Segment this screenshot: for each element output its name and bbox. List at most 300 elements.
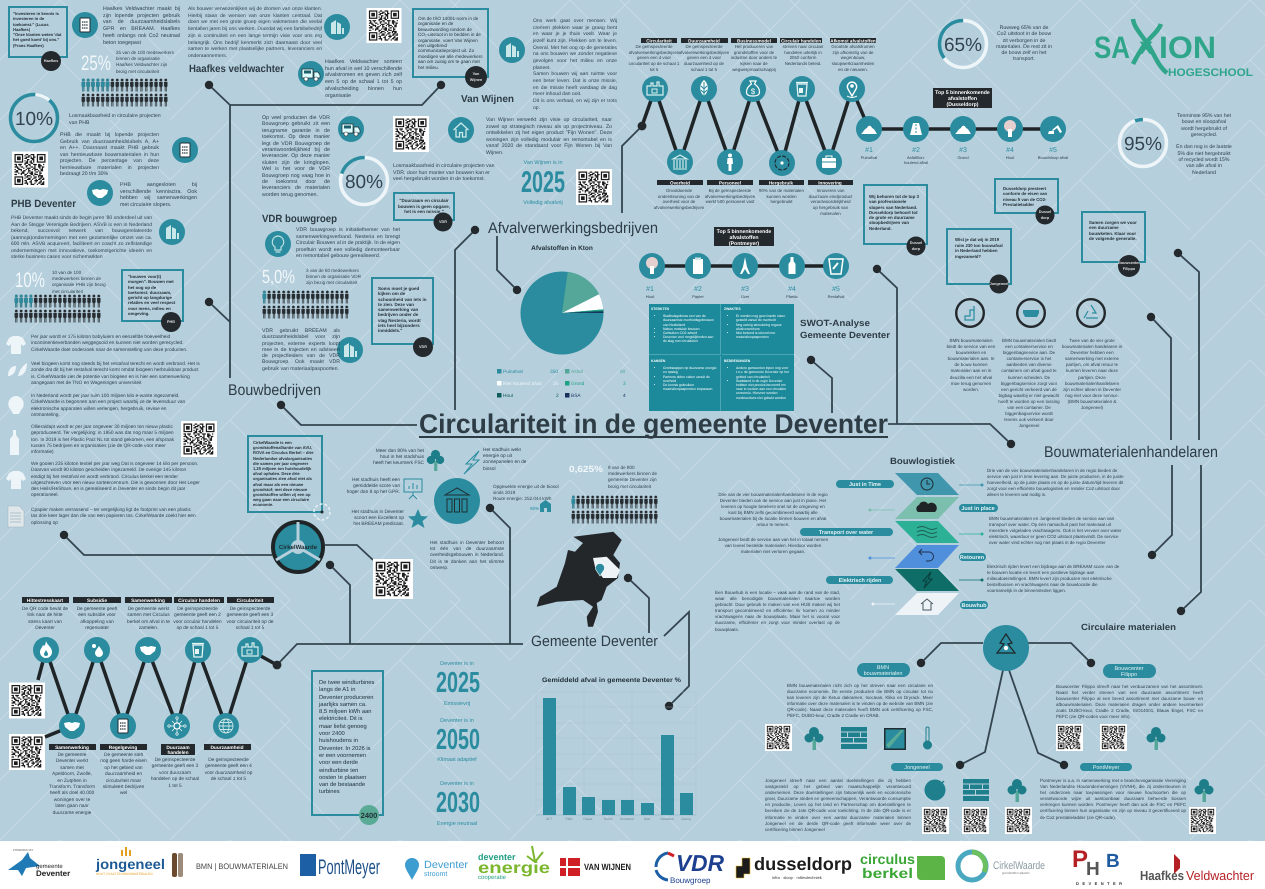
text: stadhuis GPR: Het stadhuis heeft een gemiddelde score van hoger dan 8 op het GPR.	[347, 478, 400, 495]
quote: windturbines: De twee windturbines langs de A1 in Deventer produceren jaarlijks samen ca. 8,5 miljoen kWh aan elektriciteit. Dit is maar liefst genoeg voor 2400 huishoudens in Deventer. In 2026 is er een voornemen voor een derde windturbine ten oosten te plaatsen van de bestaande turbines	[319, 680, 374, 795]
pie chart: afvalstoffen in Kton: Afvalstoffen in Kton	[531, 245, 593, 252]
bar chart: gemiddeld afval: GFT	[546, 817, 552, 821]
icon: house 95 percent: 95%	[530, 506, 539, 511]
pie legend: Asfalt	[571, 369, 584, 375]
pie legend: Puinafval	[503, 369, 523, 375]
year 2050 klimaat adaptief	[436, 718, 480, 763]
logo: BMN: BMN | BOUWMATERIALEN	[196, 862, 288, 871]
SWOT table: Stadhuisgebouw een van de duurzaamste overheidsgebouwen van Nederland	[663, 314, 714, 327]
quote: Jongeneel: Wist je dat wij in 2019 ruim 230 ton bouwafval in Nederland hebben ingezameld?	[955, 237, 1003, 258]
text: Van Wijnen fijn wonen: Van Wijnen verwerkt zijn visie op circulariteit, naar zowel op strategisch niveau als op projectniveau. Zo ontwikkelen zij het eigen product "Fijn Wonen". Deze woningen zijn volledig modulair en remontabel en is vanaf 2020 de standaard voor Fijn Wonen bij Van Wijnen.	[486, 117, 612, 156]
quote: VDR Nesteria	[371, 277, 434, 345]
ranking labels Pontmeyer: #1	[646, 286, 654, 293]
map of the Netherlands	[537, 532, 622, 627]
ring: 65 percent CO2	[930, 11, 996, 77]
text: Jongeneel materialen: Jongeneel streeft naar een aantal doelstellingen die zij hebben vastgesteld op het gebied van maatschappelijk verantwoord ondernemen. Deze doelstellingen zijn fatsoenlijk werk en economische groei, Duurzame steden en gemeenschappen, Verantwoorde consumptie en productie, Leven op het land en Partnerschap om doelstellingen te bereiken zie de 1ste QR-code voor toelichting. In de 2de QR-code is er informatie te vinden over een aantal duurzame materialen binnen Jongeneel en de derde QR-code geeft informatie weer over de certificering binnen Jongeneel	[765, 778, 911, 832]
logo: deventer energie: deventer	[478, 852, 516, 862]
pie legend: 25	[553, 381, 559, 387]
bar chart: gemiddeld afval: Textiel	[603, 817, 613, 821]
SWOT table: Deventer veel mogelijkheden aan de slag met circulariteit	[663, 335, 713, 343]
text: De geïnspecteerde gemeente geeft een 4 voor duurzaamheid op de schaal 1 tot 5	[205, 758, 252, 782]
logo: circulus berkel: berkel	[862, 865, 913, 881]
quote: Bouwcenter Filippo: Samen zorgen we voor een duurzame bouwketen. Klaar voor de volgende generatie.	[1089, 220, 1137, 241]
top row labels gemeente: Circulariteit	[237, 598, 264, 604]
pill: Bouwcenter Filippo: Bouwcenter	[1114, 666, 1144, 672]
SWOT table: Stadsland in de regio Deventer hebben niet precies bevoorrd om naar te werken aan een circulaire economie. Hiervoor worden medewerkers niet gebukt worden	[736, 379, 786, 400]
logo: circulus berkel	[860, 851, 945, 881]
SWOT table: Partners delen zaken vanuit de overheid	[663, 375, 710, 383]
SWOT table: KANSEN	[651, 359, 665, 363]
ranking labels Pontmeyer: #2	[694, 286, 702, 293]
text: Haafkes 25 of 100: 25 van de 100 medewerkers binnen de organisatie Haafkes Veldwachter zijn bezig met circulariteit	[116, 50, 174, 74]
logo: CirkelWaarde: CirkelWaarde	[993, 860, 1045, 872]
ranking labels Dusseldorp: Hout	[1006, 155, 1015, 160]
pill: Jongeneel	[891, 763, 943, 771]
ranking labels Dusseldorp: Bouw/sloop afval	[1038, 155, 1068, 160]
connector: Afvalverwerkingsbedrijven to title	[455, 226, 479, 410]
ranking labels Dusseldorp: #2	[912, 147, 920, 154]
logo: Deventer stroomt: Deventer	[424, 859, 469, 871]
ring: 95 percent recycling	[1113, 113, 1173, 173]
footer logos	[0, 841, 1265, 889]
text: VDR 3 van 60: 3 van de 60 medewerkers binnen de organisatie VDR zijn bezig met circulariteit	[306, 268, 361, 285]
bottom row labels gemeente: Samenwerking	[55, 745, 89, 751]
top row labels afvalverwerkers	[641, 38, 876, 43]
text: De gemeente Deventer werkt samen met Apeldoorn, Zwolle, en Zutphen in Transform. Transform heeft als doel 40.000 woningen over te laten gaan naar duurzame energie	[49, 753, 95, 816]
icon: tree Filippo	[1146, 727, 1166, 750]
connector: heading to pie chart	[497, 236, 521, 294]
logo: PontMeyer: PontMeyer	[318, 856, 380, 879]
top 5 box Pontmeyer: afvalstoffen	[729, 235, 759, 241]
logo: gemeente Deventer: gemeente	[36, 864, 63, 870]
text: Pontmeyer materialen: Pontmeyer is o.a. in samenwerking met e branchevoganisatie Vereniging Van Nederlandse Houtondernemingen (VVNH), die zij ondersteunen in het onderzoek naar toepassingen voor nieuwe houtsoorten die op verantwoorde wijze uit aantoonbaar duurzaam beheerde bossen verkregen kunnen worden. Pontmeyer heeft dan ook de FSC en PEFC certificering binnen hun organisatie en zijn op niveau 3 gecertificeerd op de Co2 prestatieladder (zie QR-code).	[1040, 778, 1186, 820]
pill: Jongeneel: Jongeneel	[904, 765, 930, 771]
SWOT table: STERKTES	[651, 307, 669, 311]
heading: Bouwmaterialenhandelaren: Bouwmaterialenhandelaren	[1044, 444, 1218, 461]
top 5 box Pontmeyer: Top 5 binnenkomende	[717, 229, 771, 235]
text: opgewekte energie	[493, 484, 559, 501]
icon: bricks	[841, 727, 867, 749]
black name badges: Filippo	[1123, 267, 1136, 271]
quote: CirkelWaarde: CirkelWaarde is een grondstoffenalliantie van AVU, ROVA en Circulus Berkel – drie Nederlandse afvalorganisaties die samen per jaar ongeveer 1,25 miljoen ton huishoudelijk afval ophalen. Deze drie organisaties zien afval niet als afval maar als een nieuwe grondstof; met deze nieuwe grondstoffen willen zij een op weg gaan naar een circulaire economie.	[253, 440, 314, 507]
icon: thermometer	[923, 727, 932, 750]
10 percent: 10%	[15, 269, 45, 292]
Saxion logo: ION	[1159, 30, 1216, 65]
black name badges: Dussel	[1039, 210, 1051, 214]
logo: deventer energie: energie	[478, 860, 550, 877]
text: Het produceren van grondstoffen voor de industrie door anders te kijken naar de wegwerpmaatschappij	[731, 44, 777, 72]
text: De geïnspecteerde gemeente geeft een 3 voor circulariteit op de schaal 1 tot 5	[227, 607, 273, 631]
text: De gemeente werkt samen met Circulus berkel om afval in te zamelen.	[127, 607, 170, 631]
quote: Jongeneel	[946, 228, 1012, 285]
text: gemeente 5 of 800: 8 van de 800 medewerkers binnen de gemeente Deventer zijn bezig met circulariteit	[608, 465, 657, 489]
logo: deventer energie	[478, 846, 550, 881]
quote: CirkelWaarde	[247, 435, 323, 513]
ranking labels Pontmeyer: Papier	[692, 294, 704, 299]
big white percentages	[15, 52, 603, 474]
year 2030 energie neutraal: Energie neutraal	[437, 821, 477, 827]
quote: Dusseldorp top 3	[863, 184, 928, 245]
top row labels gemeente: Circulair handelen	[178, 598, 220, 604]
quote: Van Wijnen	[412, 8, 489, 78]
icon: target	[924, 780, 946, 800]
bottom row labels afvalverwerkers: Innovering	[818, 180, 842, 185]
heading: Gemeente Deventer: Gemeente Deventer	[531, 633, 658, 650]
top 5 box Dusseldorp: afvalstoffen	[948, 96, 977, 102]
icon: house 95 percent	[530, 500, 551, 512]
text: Haafkes afval: Haafkes Veldwachter sorteert hun afval in wel 10 verschillende afvalstromen en geven zich zelf een 5 op de schaal 1 tot 5 op afvalscheiding binnen hun organisatie	[325, 59, 402, 99]
bottom row labels afvalverwerkers: Overheid	[670, 180, 690, 185]
top 5 box Dusseldorp: (Dusseldorp)	[946, 102, 979, 108]
bottom row labels gemeente	[49, 744, 251, 756]
SWOT table: Gerbuiken CO2 arbeid	[663, 331, 697, 335]
pill: Bouwcenter Filippo: Filippo	[1121, 672, 1137, 678]
icon: small recycling mark	[314, 504, 330, 520]
connector: CirkelWaarde to list	[60, 531, 272, 555]
year 2025 Van Wijnen: Van Wijnen is in	[523, 160, 563, 166]
text: textiel: We gooien 235 kiloton textiel per jaar weg Dat is ongeveer 14 kilo per persoon. Daarvan wordt 90 kiloton gescheiden ingezameld. De overige 145 kiloton eindigt bij het restafval en wordt verbrand. Circulus Berkel een tender uitgeschreven voor een nieuw sorteercentrum. Die is gewonnen door Het Leger des Heils/ReShare, en is gerealiseerd in Deventer en sinds begin dit jaar operationeel.	[31, 462, 200, 498]
pie legend: 4	[623, 393, 626, 399]
logo: dusseldorp: infra · sloop · milieutechniek	[772, 875, 822, 880]
black name badges: Jongeneel	[990, 282, 1008, 286]
ring: 10 percent PHB: 10%	[15, 109, 53, 130]
icon: leaves	[8, 363, 27, 376]
bottom row labels gemeente: Duurzaam	[166, 745, 190, 751]
labels top row gemeente	[22, 606, 274, 631]
connector: Bouwmaterialenhandelaren down	[1148, 465, 1201, 615]
text: VDR BREEAM: VDR gebruikt BREEAM als duurzaamheidslabel voor zijn projecten, externe experts loopt mee in de trajecten en adviseert de projectleiders van de VDR Bouwgroep. Ook maakt VDR gebruik van materiaalpaspoorten.	[262, 328, 340, 372]
year 2030 energie neutraal: 2030	[436, 787, 480, 819]
ranking labels Dusseldorp: Asfalt/ton-	[907, 155, 926, 160]
icon: star	[408, 509, 428, 528]
ring: 65 percent CO2: 65%	[944, 35, 982, 56]
people: VDR 3 of 60	[262, 290, 349, 320]
text: Haafkes labels: Haafkes Veldwachter maakt bij zijn lopende projecten gebruik van de duurzaamheidslabels GPR en BREAAM. Haafkes heeft onlangs ook Co2 neutraal beton toegepast	[103, 6, 180, 46]
logo: PontMeyer	[300, 854, 380, 879]
quote: VDR Nesteria: Soms moet je goed kijken om de schoonheid van iets in te zien. Deze van samenwerking van bedrijven onder de vlag Nesteria, wordt iets heel bijzonders inmiddels."	[378, 286, 427, 333]
bar chart: gemiddeld afval	[536, 677, 696, 821]
logo: jongeneel	[95, 847, 165, 876]
text: als bouwer: Als bouwer verwezenlijken wij de dromen van onze klanten. Hierbij staan de wensen van onze klanten centraal. Dat doen we met een grote groep eigen vakmensen die veelal tientallen jaren bij ons werken. Doordat wij een familiebedrijf zijn is continuïteit en een lange termijn visie voor ons erg belangrijk. Ons bedrijf kenmerkt zich daarnaast door veel samen te werken met plaatselijke partners, leveranciers en onderaannemers.	[188, 6, 322, 59]
5,0 percent: 5,0%	[262, 267, 295, 288]
circulaire materialen icons	[804, 625, 1214, 802]
pie legend: 2	[556, 393, 559, 399]
logo: Haafkes Veldwachter	[1140, 854, 1255, 883]
pie legend: 3	[623, 381, 626, 387]
text: 90% van de materialen kunnen worden hergebruikt	[759, 188, 804, 204]
year 2025 emissievrij	[436, 661, 480, 707]
icon: clock	[921, 478, 933, 490]
logo: jongeneel: HOUT, PLAAT EN BOUWMATERIALEN	[96, 872, 153, 876]
text: PHB intro: PHB Deventer maakt sinds de begin jaren '80 onderdeel uit van Aan de Stegge Verenigde Bedrijven. ASVB is een in Nederland bekend, succesvol netwerk van bouwgerelateerde (aannoja)ondernemingen met een gezamenlijke omzet van ca. 600 mln. ASVB acquireert, faciliteert en coacht zo zelfstandige ondernemingen met innovatieve, toekomstgerichte ideeën en sterke business cases voor nichemarkten	[11, 215, 152, 260]
icon: lightning	[464, 451, 479, 474]
black name badges	[41, 51, 1140, 357]
ring: 80 percent VDR: 80%	[345, 172, 383, 193]
heading: PHB Deventer: PHB Deventer	[11, 198, 76, 210]
quote: Haafkes	[8, 6, 68, 58]
year 2030 energie neutraal	[436, 781, 480, 827]
bottom row labels afvalverwerkers: Personeel	[719, 180, 741, 185]
logo: gemeente Deventer	[8, 848, 70, 878]
people: gemeente 5 of 800	[571, 495, 658, 525]
pill: Bouwcenter Filippo	[1103, 664, 1156, 678]
text: streven naar circulair handelen uiterlijk in 2050 conform Nederlands beleid.	[783, 44, 823, 66]
bottom row labels afvalverwerkers: Hergebruik	[769, 180, 794, 185]
logo: VDR: Bouwgroep	[670, 876, 711, 885]
text: biogeen: Veel biogeen komt nog steeds bij het restafval terecht en wordt verbrand. Het is zonde dat dit bij het restafval terecht komt omdat biogeen herbruikbaar product is. CirkelWaarde ziet de potentie van biogeen en is hier een samenwerking aangegaan met de TNO en Wageningen universiteit	[31, 362, 200, 386]
quote: Haafkes: "Onze klanten weten 'dat het goed komt' bij ons." (Frans Haafkes)	[13, 32, 61, 48]
text: losmaakbaarheid VDR: Losmaakbaarheid in circulaire projecten van VDR, door hun manier van bouwen kan er veel hergebruikt worden in de toekomst.	[393, 163, 495, 182]
top 5 timeline Pontmeyer	[639, 253, 849, 279]
text: De geïnspecteerde gemeente geeft een 3 voor duurzaam handelen op de schaal 1 tot 5	[151, 758, 199, 789]
black name badges: Bouwcenter	[1118, 261, 1140, 265]
list icons CirkelWaarde	[6, 336, 27, 527]
labels bottom row gemeente	[49, 752, 252, 816]
text: PHB 10 of 100: 10 van de 100 medewerkers binnen de organisatie PHB zijn bezig met circulariteit	[52, 270, 106, 294]
text: De geïnspecteerde afvalverwerkingsbedrijven geven een 4 voor circulariteit op de schaal 1 tot 5	[629, 44, 679, 72]
text: e-waste: In Nederland wordt per jaar ruim 100 miljoen kilo e-waste ingezameld. CirkelWaarde is begonnen aan een project waarbij ze de levensduur van elektronische apparaten willen verlengen, hergebruik, revisie en ontmanteling.	[31, 394, 185, 418]
Saxion logo: HOGESCHOOL	[1168, 67, 1253, 79]
top row labels gemeente: Subsidie	[87, 598, 107, 604]
ranking labels Pontmeyer: Restafval	[828, 294, 844, 299]
title: Circulariteit in de gemeente Deventer	[419, 409, 888, 439]
text: just in time left: Drie van de vier bouwmaterialenhandelaren in de regio Deventer bieden ook de service aan just in place. Het leveren op hoogte betekent snel tot de omgeving en kost bij BMN zelfs gecombineerd waarbij alle bouwmaterialen bij de locatie binnen bouwen en afval retour te nemen.	[718, 492, 828, 527]
connector: Bouwbedrijven to title	[277, 401, 417, 425]
CirkelWaarde logo ring	[273, 522, 323, 572]
CirkelWaarde logo ring: CirkelWaarde	[279, 544, 318, 551]
pill: BMN: bouwmaterialen	[864, 671, 902, 677]
icon: bricks Jongeneel	[963, 779, 989, 801]
connector lines	[60, 81, 1201, 769]
ranking labels Pontmeyer: #3	[741, 286, 749, 293]
logo: PHB Deventer: DEVENTER	[1076, 881, 1122, 886]
icon: shirt	[6, 336, 26, 354]
text: opgewekte energie: Opgewekte energie uit de biosol sinds 2019	[493, 484, 559, 495]
SWOT table: Er worden nog geen harde eisen gesteld vanuit de overheid	[736, 314, 785, 322]
bouwlogistiek pills: Just in Time	[849, 482, 881, 488]
ranking labels Pontmeyer: IJzer	[741, 294, 750, 299]
SWOT table	[649, 304, 794, 411]
text: De gemeente stelt nog geen harde eisen op het gebied van duurzaamheid en circulariteit maar stimuleert bedrijven wel	[100, 753, 147, 796]
bar chart: gemiddeld afval: Overig	[681, 817, 691, 821]
text: Bij de geïnspecteerde afvalverwerkingsbedrijven werkt 500 personeel vast	[705, 188, 755, 204]
logo: deventer energie: cooperatie	[478, 874, 507, 881]
icon: presentation	[404, 479, 422, 499]
text: De geïnspecteerde afvalverwerkingsbedrijven geven een 4 voor duurzaamheid op de schaal 1 tot 5	[679, 44, 729, 72]
text: stadhuis BREEAM: Het stadhuis in Deventer scoort een Excellent op het BREEAM predicaat.	[351, 510, 404, 527]
logo: Deventer stroomt: stroomt	[424, 871, 447, 878]
text: De geïnspecteerde gemeente geeft een 2 voor circulair handelen op de schaal 1 tot 5	[173, 607, 222, 631]
text: PHB kennis: PHB aangesloten bij verschillende kennisctra. Ook hebben wij samenwerkingen met circulaire slopers.	[120, 182, 197, 208]
text: BMN service: BMN bouwmaterialen biedt de service van een bouwrekken en bouwmaterialen aan. In de bouw kunnen materialen aan en in deuzilla een het afval moe terug genomen worden.	[947, 338, 995, 392]
text: just in time right: Drie van de vier bouwmaterialenhandelaren in de regio bieden de service van just in time levering aan. De juiste producten, in de juiste hoeveelheid, op de juiste plaats en op de juiste datum/tijd leveren dit zorgt voor een efficiënte bouwlogistiek en minder Co2 uitstoot door alleen te leveren wat nodig is.	[987, 468, 1124, 497]
target years	[436, 160, 565, 827]
Saxion logo: SA	[1094, 30, 1130, 65]
top 5 box Dusseldorp	[933, 88, 992, 108]
logo: VDR	[656, 850, 724, 885]
heading: Bouwbedrijven: Bouwbedrijven	[228, 382, 321, 399]
icon: return arrow	[919, 549, 934, 561]
connector: bar chart to heading	[664, 612, 689, 710]
bar chart: gemiddeld afval: PMD	[565, 817, 573, 821]
connector: title to right	[873, 265, 1015, 448]
SWOT table: Niet bekend is tekend met materialenpaspoorten	[736, 331, 775, 339]
logo: PHB Deventer	[1072, 846, 1122, 886]
text: BMN container: BMN bouwmaterialen biedt een containerservice en biggenbagservice aan. De containerservice is het aanbieden van diverse containers om afval goed te kunnen scheiden. De biggenbagservice zorgt voor een gericht verkeerd van de bigbag waarbij er niet gewacht hoeft te worden op een lossing van een container. De biggenbagservice wordt tevens ook verkeert door Jongeneel	[998, 338, 1060, 428]
text: vier bouwmaterialenhandelaren: Twee van de vier grote bouwmaterialen handelaren in Deventer hebben een samenwerking met externe partijen, om afval retour te kunnen leveren naar deze partijen. Deze bouwmaterialenhandelaren zijn echter alleen in Deventer nog niet voor deze service. (BMN bouwmaterialen & Jongeneel)	[1062, 338, 1122, 410]
icon: shirt 2	[6, 471, 26, 489]
text: BMN materialen: BMN bouwmaterialen richt zich op het streven naar een circulaire en duurzame economie. De eerste producten die BMN op circulair tot nu kan leveren zijn de Ketuo dakramen, Isoclean, Kliko en Dryrack. Meer informatie over deze materialen is te vinden op de website van BMN (zie QR-code). Naast deze materialen heeft BMN ook certificering op FSC, PEFC, DUBO-keur, Cradle 2 Cradle en CRAB.	[787, 683, 933, 718]
icon: bottle	[10, 430, 19, 455]
text: stadhuis energie: Het stadhuis wekt energie op uit zonnepanelen en de biosol	[483, 448, 526, 472]
bottom row labels afvalverwerkers	[657, 180, 853, 185]
heading: Afvalverwerkingsbedrijven: Afvalverwerkingsbedrijven	[488, 220, 658, 237]
SWOT table: Nabus modulair bouwen	[663, 327, 700, 331]
connector: CirkelWaarde to QR code	[325, 545, 373, 560]
black name badges: Haafkes	[44, 59, 58, 63]
bottom row labels gemeente: handelen	[167, 750, 189, 756]
0,625 percent: 0,625%	[569, 464, 603, 474]
year 2025 emissievrij: Emissievrij	[444, 701, 470, 707]
SWOT table: De kennis gebruiken materialenpaspoorten toepassen	[663, 383, 712, 391]
year 2030 energie neutraal: Deventer is in	[440, 781, 474, 787]
logo: jongeneel: jongeneel	[95, 856, 165, 872]
pie legend: Grond	[571, 381, 585, 387]
zigzag: afvalverwerkers timeline	[638, 76, 1066, 176]
Saxion logo	[1094, 19, 1253, 79]
logo: PHB Deventer: H	[1086, 859, 1100, 880]
text: opgewekte energie: Route energie: 252.044 kWh	[493, 496, 551, 501]
bar chart: gemiddeld afval: Papier	[583, 817, 594, 821]
text: retouren left: Jongeneel biedt de service aan van het in totaal nemen van teveel bestelde materialen. Hierdoor worden materialen niet verloren gegaan.	[718, 537, 828, 554]
labels top row timeline	[628, 44, 875, 72]
bottom row labels gemeente: Duurzaamheid	[210, 745, 244, 751]
bouwlogistiek pills: Transport over water	[819, 530, 874, 536]
icon: recycling	[983, 625, 1029, 671]
ring: 95 percent recycling: 95%	[1124, 134, 1162, 155]
top row labels afvalverwerkers: Circulair handelen	[781, 38, 821, 43]
text: transport right: BMN bouwmaterialen en Jongeneel bieden de service aan van transport over water. Op één namachuit past het materiaal uit meerdere volgeladen vrachtwagens. Ook is het vervoer over water elektrisch, waardoor er geen CO2 uitstoot plaatsvindt. De service over water vind echter nog niet plaats in de regio Deventer	[989, 516, 1122, 545]
pie legend: 350	[550, 369, 558, 375]
year 2050 klimaat adaptief: 2050	[436, 724, 480, 756]
black name badges: PHB	[167, 320, 175, 324]
quote: PHB: "bouwen voor(t) morgen". Bouwen met het oog op de toekomst: duurzaam, gericht op langdurige relaties en veel respect voor mens, milieu en omgeving.	[128, 274, 175, 316]
text: plastic: Ollieraidapt wordt er per jaar ongeveer 30 miljoen ton nieuw plastic geproduceerd. Ter vergelijking: in 1950 was dat nog maar 5 miljoen ton. In 2019 is het Plastic Pact NL tot stand gekomen, een afspraak tussen 75 bedrijven en organisaties (zie de QR-code voor meer informatie)	[31, 425, 174, 455]
ring: 10 percent PHB	[9, 93, 59, 143]
bouwlogistiek chevron stack	[868, 473, 984, 615]
bouwlogistiek pills: Retouren	[960, 555, 985, 561]
text: losmaakbaarheid PHB: Losmaakbaarheid in circulaire projecten van PHB	[69, 113, 161, 126]
icon: house	[921, 599, 933, 610]
year 2025 Van Wijnen: Volledig afvalvrij	[523, 200, 563, 206]
ranking labels Pontmeyer: #5	[832, 286, 840, 293]
icon: document	[8, 506, 24, 527]
logo: Haafkes Veldwachter: Veldwachter	[1186, 868, 1255, 883]
logo: BMN	[172, 853, 288, 877]
Saxion logo: X	[1139, 38, 1153, 58]
bouwlogistiek pills: Bouwhub	[961, 603, 987, 609]
text: ons werk: Ons werk gaat over mensen. Wij creëren plekken waar je graag bent en waar je je thuis voelt. Waar je jezelf kunt zijn. Plekken om te leven. Overal. Met het oog op de generaties na ons bouwen we zonder negatieve gevolgen voor het milieu en onze planeet.	[533, 18, 617, 71]
headings	[11, 63, 1218, 650]
text: 95 percent: En dan nog is de laatste 5% die niet hergebruikt of recycled wordt 15% van alle afval in Nederland	[1176, 144, 1232, 176]
top 5 box Pontmeyer: (Pontmeyer)	[729, 241, 759, 247]
SWOT table: Andere gemeenten lopen nog voor t.o.v. de gemeente Deventer op het gebied van circulariteit	[736, 366, 789, 379]
ranking labels Pontmeyer	[646, 286, 844, 299]
ranking labels Dusseldorp: #1	[865, 147, 873, 154]
logo: PHB Deventer: B	[1106, 851, 1120, 872]
quote: Dusseldorp top 3: Wij behoren tot de top 3 van professionele slopers van Nederland. Dusseldorp behoort tot de grote en duurzame sloopbedrijven van Nederland.	[869, 194, 919, 231]
icon: bulb	[8, 396, 24, 414]
labels bottom row timeline	[654, 188, 852, 216]
logo: circulus berkel: circulus	[860, 851, 915, 867]
bar chart: gemiddeld afval: Kunststof	[620, 817, 634, 821]
ranking labels Dusseldorp	[861, 147, 1068, 165]
year 2050 klimaat adaptief: Deventer is in	[440, 718, 474, 724]
ranking labels Dusseldorp: #5	[1049, 147, 1057, 154]
black name badges: VDR	[419, 345, 427, 349]
bouwlogistiek pills: Just in place	[961, 506, 995, 512]
2400 badge: 2400	[361, 811, 377, 820]
logo: Van Wijnen	[560, 858, 631, 876]
pill: BMN: BMN	[877, 665, 889, 671]
text: Innoveren van duurzaam eindproduct verantwoordelijkheid op hergebruik van materialen	[809, 188, 852, 216]
text: De QR code bevat de link naar de hitte stress kaart van Deventer	[22, 607, 68, 631]
heading: Haafkes veldwachter: Haafkes veldwachter	[189, 63, 284, 75]
pie legend: Niet houtend afval	[503, 381, 542, 387]
quote: Haafkes: "Investeren in kennis is investeren in de toekomst." (Lucas Haafkes)	[13, 11, 59, 32]
text: bouwhub left: Een Bouwhub is een locatie – vaak aan de rand van de stad, waar alle benodigde bouwmaterialen naartoe worden gebracht. Door gebruik te maken van een HUB maken wij het transport gecombineerd en efficiënter. Er komen zo minder vrachtwagens naar de bouwplaats. Maar het is vooral voor duurzame, efficiënter en zorgt voor minder overlast op de bouwplaats.	[715, 590, 840, 632]
ranking labels Pontmeyer: Plastic	[786, 294, 798, 299]
ring: 80 percent VDR	[334, 151, 394, 211]
ranking labels Pontmeyer: #4	[788, 286, 796, 293]
text: Onvoldoende ondersteuning van de overheid voor de afvalverwerkingsbedrijven	[654, 188, 704, 210]
pie legend: 60	[620, 369, 626, 375]
text: Grootste afvalstromen zijn afkomstig van de wegenbouw, sloopwerkzaamheden en de nieuwen.	[831, 44, 875, 72]
icon: tree Pontmeyer	[1194, 779, 1214, 802]
text: papier: Cpapier maken verrassend – ter vergelijking ligt de footprint van een plastic tas drie keer lager dan die van een papieren tas. CirkelWaarde zoekt hier een oplossing op	[31, 508, 196, 526]
text: VDR producten: Op veel producten die VDR Bouwgroep gebruikt zit een terugname garantie in de toekomst. Op deze manier legt de VDR Bouwgroep de verantwoordelijkheid bij de leverancier. Op deze manier sluiten zijn de kringlopen. Wel is het voor de VDR Bouwgroep nog vaag hoe in de toekomst door de leveranciers de materialen worden terug genomen.	[262, 115, 330, 198]
quote: Van Wijnen: Om de ISO 14001-norm in de organisatie en de bewustwording rondom de CO₂-uitstoot in te bedden in de organisatie, voert Van Wijnen een uitgebreid communicatieproject uit. Zo moedigen we alle medewerkers aan om zuinig om te gaan met het milieu.	[418, 16, 483, 70]
connector: Bouwbedrijven to Haafkes and Van Wijnen	[205, 81, 445, 378]
SWOT table: Grootstappen op duurzame energie en opslag	[663, 366, 717, 374]
top row labels afvalverwerkers: Afkomst afvalstoffen	[830, 38, 876, 43]
icon: tree Jongeneel	[1008, 779, 1026, 802]
logo: dusseldorp: dusseldorp	[754, 854, 852, 874]
text: PHB labels: PHB die maakt bij lopende projecten Gebruik van duurzaamheidslabels A, A+ en A++. Daarnaast maakt PHB gebruik van hernieuwbare bouwmaterialen in hun projecten. De percentage van deze hernieuwbare materialen in projecten bedraagt 20 t/m 30%	[60, 132, 159, 177]
text: De gemeente geeft een subsidie voor afkoppeling van regenwater	[77, 607, 117, 631]
quote: VDR duurzaam: "Duurzaam en circulair bouwen is geen opgave, het is een missie."	[398, 198, 450, 214]
SWOT table: BEDREIGINGEN	[724, 359, 750, 363]
stadhuis icons	[404, 450, 551, 528]
ringed icons bouwmaterialen	[956, 299, 1105, 327]
top row labels gemeente: Hittestresskaart	[27, 598, 64, 604]
people: Haafkes 25 of 100	[81, 78, 168, 108]
quote: VDR duurzaam	[393, 192, 455, 221]
logo: VDR: VDR	[676, 850, 724, 876]
text: elektrisch right: Elektrisch rijden levert een bijdrage aan de BREAAM score van de te bouwen locatie en levert een positieve bijdrage aan milieudoelstellingen. BMN levert zijn producten met elektrische bestelbussen en vrachtwagens naar de bouwlocatie die voornamelijk in de binnensteden liggen.	[987, 564, 1119, 593]
icon: tree	[804, 727, 824, 750]
logo: gemeente Deventer: Deventer	[36, 869, 70, 878]
pie chart: afvalstoffen in Kton	[520, 245, 604, 354]
logo: CirkelWaarde: grondstoffen alliantie	[1002, 871, 1030, 875]
people: PHB 10 of 100	[14, 294, 101, 324]
ranking labels Dusseldorp: #4	[1006, 147, 1014, 154]
black name badges: dorp	[912, 247, 921, 251]
ranking labels Dusseldorp: houtend afval	[904, 160, 928, 165]
quote: PHB	[121, 269, 184, 322]
black name badges: VDR	[439, 220, 447, 224]
year 2025 Van Wijnen	[521, 160, 565, 206]
